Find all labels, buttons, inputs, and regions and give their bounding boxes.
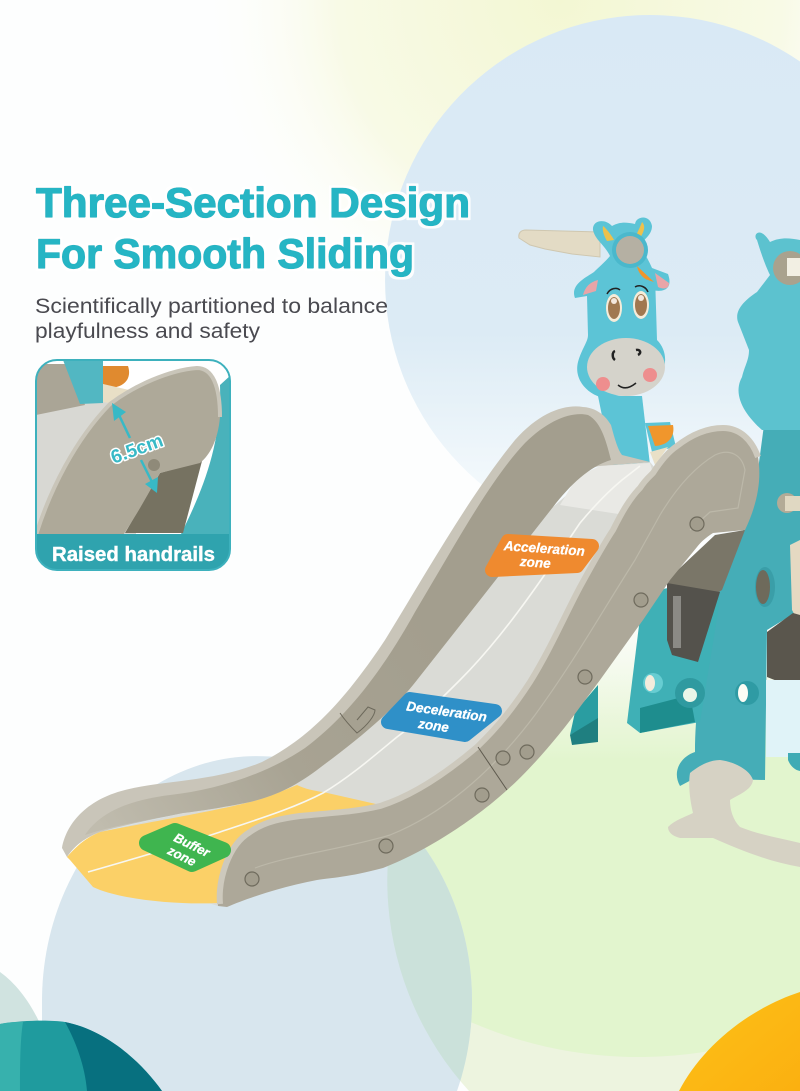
inset border (36, 360, 230, 570)
dial (612, 232, 648, 268)
eyebrows and muzzle (607, 286, 648, 294)
buffer zone surface (67, 785, 385, 903)
label: buffer zone (147, 830, 223, 869)
subtitle (35, 295, 388, 343)
label: buffer zone: Buffer (172, 830, 213, 860)
label: acceleration zone (492, 538, 592, 571)
beige bumps (790, 540, 800, 625)
label: acceleration zone: Acceleration (502, 538, 585, 559)
panel: raised handrails inset (36, 360, 231, 571)
left front leg (570, 685, 598, 745)
subtitle: Scientifically partitioned to balance (35, 295, 388, 318)
label: deceleration zone: zone (416, 716, 450, 735)
dark underside (767, 613, 800, 690)
caption band (36, 534, 230, 571)
circle: orange-yellow bottom-right (679, 992, 800, 1091)
rivets (245, 517, 704, 886)
caption: raised handrails: Raised handrails (52, 544, 215, 566)
icon: giraffe tower front (574, 218, 676, 465)
label: deceleration zone (388, 698, 495, 735)
basketball hoop (519, 230, 600, 257)
label: deceleration zone: Deceleration (405, 698, 488, 725)
bolt (777, 493, 797, 513)
icon: giraffe tower rear (677, 232, 800, 786)
ground anchor (668, 760, 800, 867)
near rail (218, 428, 759, 907)
rear leg (627, 588, 720, 733)
far rail (62, 406, 650, 857)
title (36, 179, 470, 277)
slide surface (67, 462, 665, 906)
arrow: 6.5cm measure: 6.5cm (108, 430, 166, 469)
rail seam (340, 707, 375, 733)
title: Three-Section Design (36, 179, 470, 226)
label: acceleration zone: zone (518, 554, 552, 571)
storage underside (665, 530, 745, 662)
arrow: 6.5cm measure (108, 403, 166, 493)
subtitle: playfulness and safety (35, 320, 261, 343)
label: buffer zone: zone (164, 842, 199, 869)
dome: teal bottom-left (0, 1021, 162, 1091)
title: For Smooth Sliding (36, 230, 414, 277)
centre line (88, 466, 640, 872)
eyes (606, 294, 622, 322)
